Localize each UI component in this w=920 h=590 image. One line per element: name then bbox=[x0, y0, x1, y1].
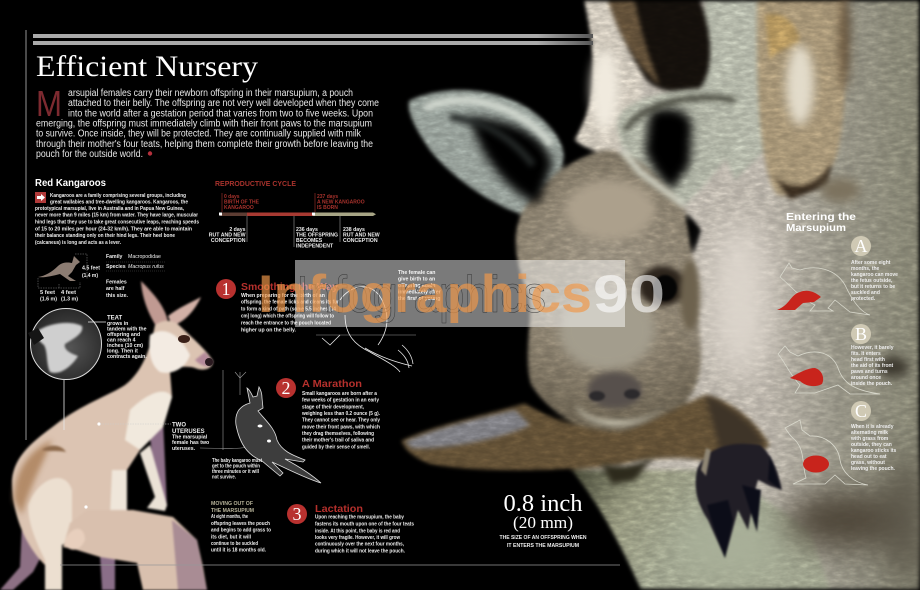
arm left bbox=[400, 395, 770, 471]
text: red kangaroos: Kangaroos are a family comprising several groups, including bbox=[50, 193, 186, 199]
section 1: smoothing the way bbox=[216, 279, 339, 333]
step C: kangaroo sticks its bbox=[851, 448, 897, 454]
text: red kangaroos: great wallabies and tree-dwelling kangaroos. Kangaroos, the bbox=[50, 200, 188, 206]
bottom rule bbox=[60, 564, 620, 566]
side note: female bbox=[398, 270, 441, 302]
section 1: smoothing the way: 1 bbox=[222, 279, 230, 299]
uterus callout: The marsupial bbox=[172, 434, 208, 440]
step B: fits. It enters bbox=[851, 351, 881, 357]
reproductive cycle timeline: 237 days bbox=[317, 194, 338, 200]
size callout: 0.8 inch: (20 mm) bbox=[513, 513, 573, 532]
caption: baby kangaroo: three minutes or it will bbox=[212, 469, 259, 475]
section 2: a marathon: they drag themselves, following bbox=[302, 431, 374, 437]
section 2: a marathon: few weeks of gestation in an early bbox=[302, 398, 379, 404]
section 2: a marathon: Small kangaroos are born after a bbox=[302, 391, 377, 397]
step C: When it is already bbox=[851, 424, 894, 430]
section 3: lactation: inside. At this point, the baby is red and bbox=[315, 528, 400, 534]
caption: baby kangaroo: not survive. bbox=[212, 475, 236, 481]
size diagram bbox=[38, 254, 100, 302]
panel: entering the marsupium: Marsupium bbox=[786, 222, 846, 234]
taxonomy table: this size. bbox=[106, 293, 128, 299]
header bars bbox=[33, 34, 593, 45]
title: Efficient Nursery bbox=[36, 50, 258, 83]
size callout: 0.8 inch bbox=[500, 491, 587, 549]
text: moving out of the marsupium: offspring leaves the pouch bbox=[211, 521, 270, 527]
uterus callout: female has two bbox=[172, 440, 209, 446]
step A: A bbox=[854, 236, 868, 256]
step C: with grass from bbox=[850, 436, 889, 442]
size diagram: (1.3 m) bbox=[61, 296, 78, 302]
step A: but it returns to be bbox=[851, 284, 895, 290]
taxonomy table: are half bbox=[106, 286, 125, 292]
step C: leaving the pouch. bbox=[851, 466, 896, 472]
text: moving out of the marsupium: its diet, but it will bbox=[211, 534, 252, 540]
step C: grass, without bbox=[851, 460, 885, 466]
step B: head first with bbox=[851, 357, 885, 363]
icon: arrow box bbox=[35, 192, 46, 203]
panel: entering the marsupium: Entering the bbox=[786, 211, 856, 223]
reproductive cycle timeline: CONCEPTION bbox=[343, 238, 378, 244]
teat callout: grows in bbox=[107, 321, 128, 327]
reproductive cycle timeline bbox=[209, 179, 380, 250]
text: moving out of the marsupium: At eight months, the bbox=[211, 514, 248, 520]
section 3: lactation: continuously over the next four months, bbox=[315, 542, 404, 548]
reproductive cycle timeline: A NEW KANGAROO bbox=[317, 200, 365, 206]
watermark band: Infographics bbox=[296, 266, 546, 324]
panel: entering the marsupium bbox=[777, 211, 898, 485]
intro text: emerging, the offspring must immediately climb with their front paws to the marsupium bbox=[36, 118, 372, 130]
teat callout: inches (10 cm) bbox=[107, 343, 143, 349]
uterus callout bbox=[84, 422, 209, 509]
watermark band: 90 bbox=[593, 265, 665, 324]
left rule bbox=[25, 30, 27, 440]
intro text bbox=[36, 83, 379, 160]
step C bbox=[785, 401, 897, 485]
section 2: a marathon bbox=[276, 378, 381, 450]
size diagram: (1.4 m) bbox=[82, 273, 98, 279]
step C: C bbox=[855, 401, 867, 421]
section 2: a marathon: A Marathon bbox=[302, 378, 362, 390]
reproductive cycle timeline: RUT AND NEW bbox=[209, 232, 246, 238]
text: moving out of the marsupium: MOVING OUT OF bbox=[211, 501, 253, 507]
line drawing: kangaroo licking bbox=[316, 287, 416, 372]
caption: baby kangaroo bbox=[212, 458, 262, 481]
teat callout: tandem with the bbox=[107, 326, 147, 332]
step B: However, it barely bbox=[851, 345, 894, 351]
text: red kangaroos: never more than 9 miles (15 km) from water. They have large, muscular bbox=[35, 213, 198, 219]
uterus callout: TWO bbox=[172, 422, 186, 428]
side note: female: give birth to an bbox=[398, 276, 435, 282]
dark top bbox=[608, 0, 710, 92]
intro text: attached to their belly. The offspring are not very well developed when they come bbox=[68, 98, 379, 109]
caption: baby kangaroo: get to the pouch within bbox=[212, 464, 260, 470]
section 3: lactation: fastens its mouth upon one of the four teats bbox=[315, 522, 414, 528]
text: moving out of the marsupium: THE MARSUPIUM bbox=[211, 508, 254, 514]
step A: months, the bbox=[851, 266, 880, 272]
section 2: a marathon: weighing less than 0.2 ounce (5 g). bbox=[301, 411, 381, 417]
text: red kangaroos bbox=[35, 193, 199, 246]
text: moving out of the marsupium: until it is 18 months old. bbox=[211, 548, 267, 554]
size callout: 0.8 inch: IT ENTERS THE MARSUPIUM bbox=[507, 543, 579, 549]
section 3: lactation: 3 bbox=[292, 504, 302, 524]
text: moving out of the marsupium bbox=[211, 501, 271, 554]
teat callout: offspring and bbox=[107, 332, 140, 338]
text: moving out of the marsupium: continue to be suckled bbox=[211, 541, 258, 547]
step A: suckled and bbox=[851, 290, 880, 296]
section 1: smoothing the way: higher up on the belly. bbox=[241, 327, 297, 333]
photo: joey in the pouch bbox=[400, 0, 920, 590]
mother's fur bbox=[565, 0, 920, 590]
heading: red kangaroos: Red Kangaroos bbox=[35, 178, 106, 189]
section 2: a marathon: guided by their sense of smell. bbox=[302, 444, 370, 450]
section 1: smoothing the way: Smoothing the Way bbox=[241, 281, 338, 293]
step C: alternating milk bbox=[851, 430, 888, 436]
text: moving out of the marsupium: and begins to add grass to bbox=[211, 528, 271, 534]
size diagram: 4.5 feet bbox=[82, 266, 100, 272]
section 1: smoothing the way: cm] long) which the offspring will follow to bbox=[241, 314, 334, 320]
section 1: smoothing the way: offspring, the female licks and cleans its fur bbox=[241, 300, 339, 306]
text: red kangaroos: of 15 to 20 miles per hour (24-32 km/h). They are able to maintain bbox=[35, 226, 192, 232]
step A: protected. bbox=[851, 296, 876, 302]
watermark band: Infographics bbox=[258, 265, 592, 324]
taxonomy table: Females bbox=[106, 280, 127, 286]
intro text: pouch for the outside world. bbox=[36, 149, 143, 160]
teat callout: contracts again. bbox=[107, 354, 147, 360]
size diagram: 5 feet bbox=[40, 290, 55, 296]
taxonomy table: Macropodidae bbox=[128, 254, 161, 260]
section 3: lactation: Upon reaching the marsupium, the baby bbox=[315, 515, 404, 521]
taxonomy table bbox=[106, 254, 165, 299]
watermark band bbox=[258, 260, 665, 327]
side note: female: offspring again bbox=[398, 283, 435, 289]
side note: female: The female can bbox=[398, 270, 435, 276]
size callout: 0.8 inch: 0.8 inch bbox=[504, 491, 582, 517]
reproductive cycle timeline: 236 days bbox=[296, 227, 318, 233]
reproductive cycle timeline: CONCEPTION bbox=[211, 238, 246, 244]
icon: paw with claws bbox=[589, 275, 782, 558]
intro text: M bbox=[36, 83, 62, 124]
taxonomy table: Macropus rufus bbox=[128, 264, 164, 270]
step B: the aid of its front bbox=[851, 363, 894, 369]
line drawing: kangaroo with climbing joey bbox=[200, 370, 321, 483]
ear interiors and face details bbox=[675, 220, 920, 585]
text: red kangaroos: hind legs that they use to take great consecutive leaps, reaching speeds bbox=[35, 220, 199, 226]
mother's leg bbox=[757, 0, 846, 196]
reproductive cycle timeline: 0 days bbox=[224, 194, 240, 200]
section 2: a marathon: move their front paws, with which bbox=[302, 424, 380, 430]
step A: the fetus outside, bbox=[851, 278, 893, 284]
section 3: lactation: looks very fragile. However, it will grow bbox=[315, 535, 401, 541]
step A: kangaroo can move bbox=[851, 272, 898, 278]
reproductive cycle timeline: 2 days bbox=[229, 227, 246, 233]
section 1: smoothing the way: When preparing for the birth of an bbox=[241, 293, 325, 299]
teat callout: can reach 4 bbox=[107, 338, 136, 344]
reproductive cycle timeline: 238 days bbox=[343, 227, 365, 233]
step B: paws and turns bbox=[851, 369, 888, 375]
step B: around once bbox=[851, 375, 881, 381]
section 3: lactation bbox=[287, 503, 414, 555]
section 1: smoothing the way: to form a kind of path (some 5.5 inches [14 bbox=[241, 307, 336, 313]
text: red kangaroos: prototypical marsupial, live in Australia and in Papua New Guinea, bbox=[35, 206, 185, 212]
intro text: into the world after a gestation period that varies from two to five weeks. Upon bbox=[68, 108, 373, 120]
reproductive cycle timeline: THE OFFSPRING bbox=[296, 232, 338, 238]
caption: baby kangaroo: The baby kangaroo must bbox=[212, 458, 262, 464]
reproductive cycle timeline: IS BORN bbox=[317, 205, 338, 211]
side note: female: immediately after bbox=[398, 290, 441, 296]
reproductive cycle timeline: BIRTH OF THE bbox=[224, 200, 260, 206]
intro text: through their mother's four teats, helping them complete their growth before leaving the bbox=[36, 139, 373, 150]
size callout: 0.8 inch: THE SIZE OF AN OFFSPRING WHEN bbox=[500, 535, 587, 541]
section 2: a marathon: 2 bbox=[282, 378, 290, 398]
teat callout bbox=[28, 308, 147, 430]
reproductive cycle timeline: REPRODUCTIVE CYCLE bbox=[215, 179, 296, 188]
section 2: a marathon: their mother's trail of saliva and bbox=[302, 438, 374, 444]
section 3: lactation: during which it will not leave the pouch. bbox=[315, 549, 406, 555]
reproductive cycle timeline: INDEPENDENT bbox=[296, 244, 334, 250]
uterus callout: uteruses. bbox=[172, 446, 196, 452]
reproductive cycle timeline: BECOMES bbox=[296, 238, 323, 244]
teat callout: long. Then it bbox=[107, 348, 138, 354]
section 3: lactation: Lactation bbox=[315, 503, 363, 515]
size diagram: (1.6 m) bbox=[40, 296, 57, 302]
uterus callout: UTERUSES bbox=[172, 429, 205, 435]
step B: B bbox=[855, 324, 867, 344]
text: red kangaroos: (calcaneus) is long and acts as a lever. bbox=[35, 240, 122, 246]
size diagram: 4 feet bbox=[61, 290, 76, 296]
step C: head out to eat bbox=[851, 454, 887, 460]
taxonomy table: Family bbox=[106, 254, 123, 260]
reproductive cycle timeline: RUT AND NEW bbox=[343, 232, 380, 238]
intro text: to survive. Once inside, they will be protected. They are continually supplied with milk bbox=[36, 128, 361, 140]
reproductive cycle timeline: KANGAROO bbox=[224, 205, 254, 211]
section 2: a marathon: stage of their development, bbox=[302, 404, 365, 410]
taxonomy table: Species bbox=[106, 264, 126, 270]
teat callout: TEAT bbox=[107, 316, 123, 322]
section 1: smoothing the way: reach the entrance to the pouch located bbox=[241, 320, 331, 326]
section 2: a marathon: They cannot see or hear. They only bbox=[302, 418, 380, 424]
left ear bbox=[407, 89, 565, 215]
text: red kangaroos: their balance standing only on their hind legs. Their heel bone bbox=[35, 233, 175, 239]
step B: inside the pouch. bbox=[851, 381, 893, 387]
right ear bbox=[617, 88, 745, 205]
intro text: arsupial females carry their newborn offspring in their marsupium, a pouch bbox=[68, 88, 353, 99]
step A: After some eight bbox=[851, 260, 891, 266]
head bbox=[515, 150, 701, 435]
step B bbox=[778, 324, 894, 394]
side note: female: the first of young bbox=[398, 296, 440, 302]
step A bbox=[777, 236, 898, 315]
large kangaroo photo bbox=[0, 281, 213, 590]
step C: outside, they can bbox=[851, 442, 892, 448]
